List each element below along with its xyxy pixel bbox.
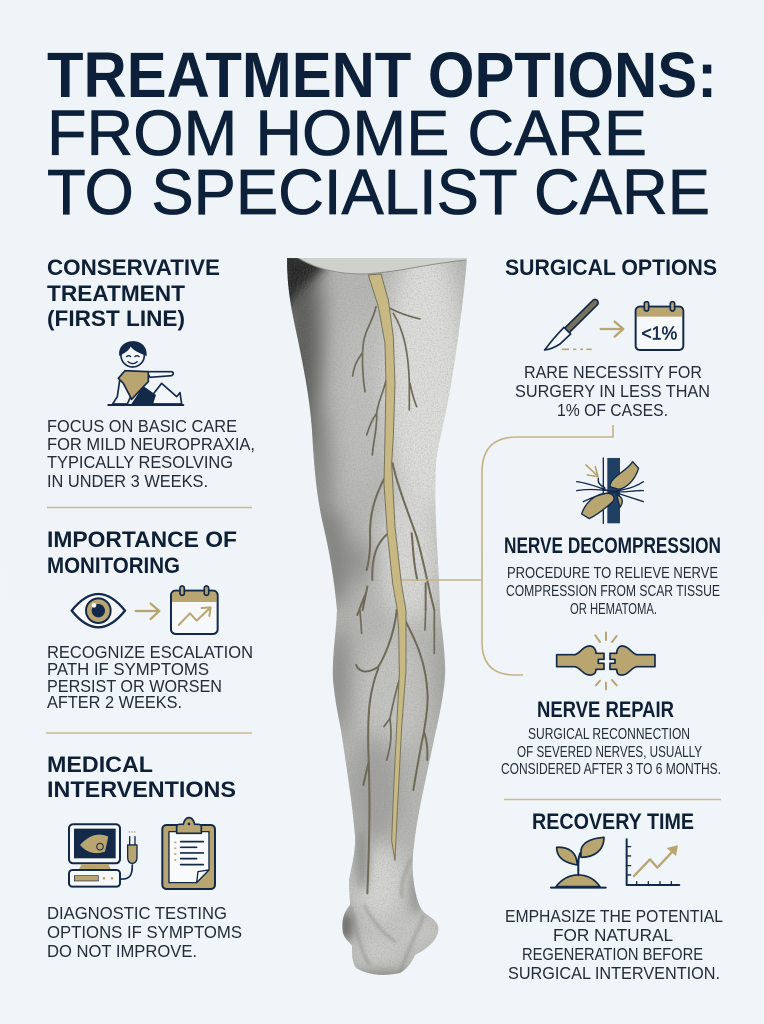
- heading: conservative treatment: CONSERVATIVE: [47, 255, 220, 280]
- text: recovery description: FOR NATURAL: [553, 925, 673, 945]
- panel: conservative treatment: [47, 255, 255, 491]
- heading: importance of monitoring: MONITORING: [47, 553, 180, 578]
- branch nerves, upper leg: [353, 307, 434, 615]
- text: monitoring description: [47, 642, 253, 712]
- icon: scalpel, arrow and under one percent calendar: <1%: [641, 323, 677, 344]
- text: surgical description: SURGERY IN LESS THAN: [515, 381, 710, 401]
- panel: surgical options: [505, 255, 717, 420]
- text: medical description: DIAGNOSTIC TESTING: [47, 903, 227, 923]
- text: conservative description: FOR MILD NEUROPRAXIA,: [47, 434, 255, 454]
- heading: conservative treatment: TREATMENT: [47, 281, 186, 306]
- text: monitoring description: PATH IF SYMPTOMS: [47, 659, 209, 679]
- heading: recovery time: RECOVERY TIME: [532, 809, 694, 834]
- heading: nerve repair: NERVE REPAIR: [537, 697, 674, 722]
- text: conservative description: IN UNDER 3 WEEKS.: [47, 471, 208, 491]
- text: monitoring description: RECOGNIZE ESCALATION: [47, 642, 253, 662]
- icon: nerve compression: [577, 458, 643, 523]
- text: medical description: DO NOT IMPROVE.: [47, 941, 197, 961]
- text: decompression description: PROCEDURE TO RELIEVE NERVE: [507, 565, 718, 582]
- connector: surgical options to procedures and nerve: [402, 425, 613, 675]
- text: surgical description: RARE NECESSITY FOR: [524, 362, 702, 382]
- icon: growth chart: [627, 839, 679, 885]
- icon: seated person stretching: [108, 341, 183, 405]
- heel and ankle contours: [350, 858, 424, 973]
- icon: clipboard: [162, 818, 215, 889]
- heading: importance of monitoring: IMPORTANCE OF: [47, 527, 237, 552]
- text: monitoring description: AFTER 2 WEEKS.: [47, 692, 182, 712]
- text: recovery description: [505, 906, 723, 983]
- text: recovery description: REGENERATION BEFORE: [522, 944, 703, 964]
- panel: recovery time: [505, 809, 723, 983]
- heading: conservative treatment: [47, 255, 220, 331]
- text: conservative description: TYPICALLY RESOLVING: [47, 452, 233, 472]
- text: recovery description: SURGICAL INTERVENTION.: [508, 963, 720, 983]
- heading: surgical options: SURGICAL OPTIONS: [505, 255, 717, 280]
- text: nerve repair description: SURGICAL RECONNECTION: [528, 726, 690, 743]
- text: conservative description: FOCUS ON BASIC CARE: [47, 416, 237, 436]
- title: TO SPECIALIST CARE: [47, 156, 710, 228]
- text: decompression description: [506, 565, 720, 618]
- text: monitoring description: PERSIST OR WORSEN: [47, 676, 222, 696]
- text: recovery description: EMPHASIZE THE POTENTIAL: [505, 906, 723, 926]
- text: nerve repair description: [501, 726, 721, 778]
- icon: eye, arrow and calendar chart: [72, 586, 218, 634]
- text: medical description: OPTIONS IF SYMPTOMS: [47, 922, 242, 942]
- panel: medical interventions: [47, 752, 242, 961]
- panel: nerve repair: [501, 633, 721, 778]
- title: [47, 39, 717, 228]
- text: surgical description: [515, 362, 710, 420]
- heading: medical interventions: MEDICAL: [47, 752, 153, 777]
- leg illustration with sciatic nerve: [287, 258, 467, 975]
- text: nerve repair description: OF SEVERED NERVES, USUALLY: [517, 744, 702, 761]
- main sciatic nerve: [368, 274, 406, 861]
- panel: importance of monitoring: [47, 527, 253, 712]
- gluteal fold: [298, 258, 467, 274]
- heading: importance of monitoring: [47, 527, 237, 578]
- panel: nerve decompression: [504, 458, 721, 618]
- icon: scalpel, arrow and under one percent calendar: [545, 302, 683, 350]
- title: TREATMENT OPTIONS:: [47, 39, 717, 111]
- text: medical description: [47, 903, 242, 961]
- icon: sprout: [551, 837, 606, 888]
- branch nerves, lower leg: [356, 610, 434, 893]
- heading: medical interventions: INTERVENTIONS: [47, 777, 236, 802]
- text: surgical description: 1% OF CASES.: [557, 400, 668, 420]
- text: conservative description: [47, 416, 255, 491]
- text: decompression description: OR HEMATOMA.: [570, 601, 657, 618]
- icon: ultrasound machine: [69, 824, 137, 887]
- icon: severed nerve connector: [557, 633, 655, 689]
- heading: conservative treatment: (FIRST LINE): [47, 306, 185, 331]
- title: FROM HOME CARE: [47, 97, 647, 169]
- heading: medical interventions: [47, 752, 236, 802]
